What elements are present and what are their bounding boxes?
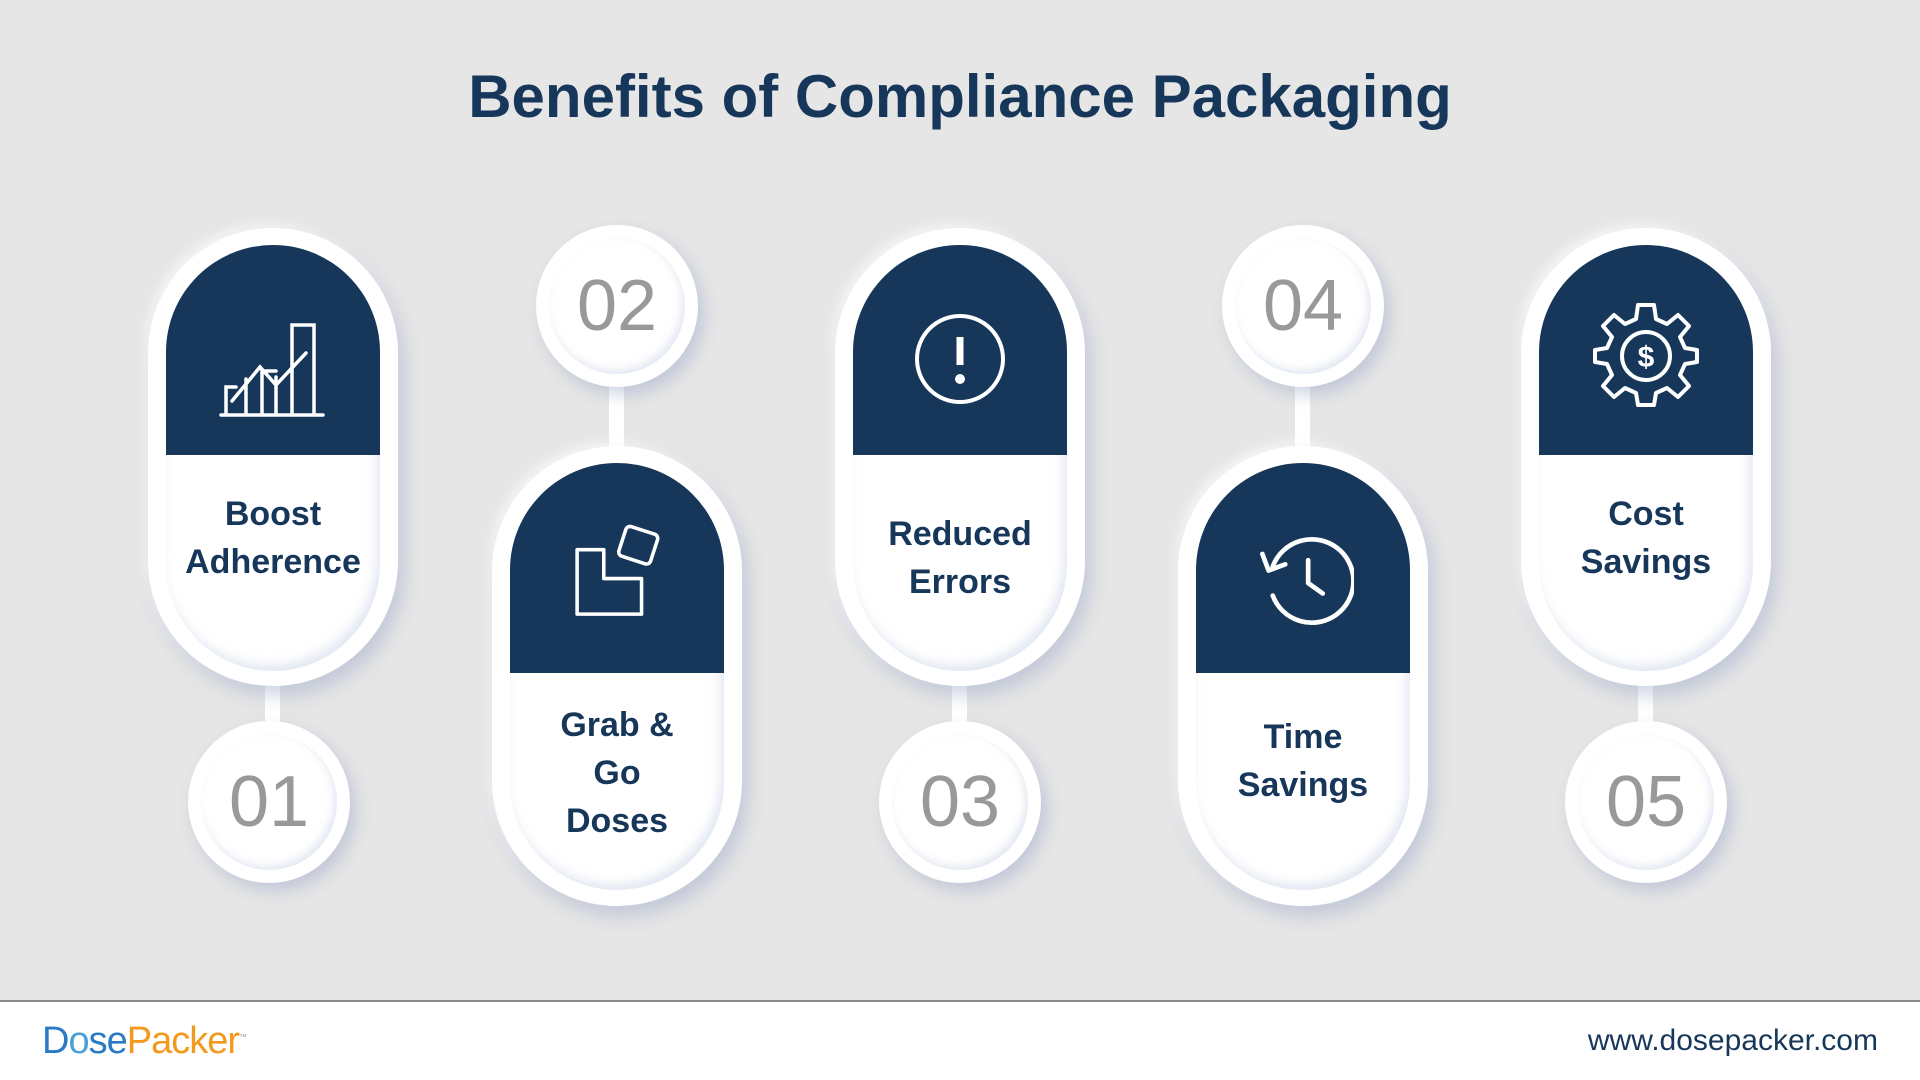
- label: Reduced: [888, 515, 1032, 553]
- footer: [0, 1000, 1920, 1080]
- number 02: 02: [577, 266, 657, 346]
- card 3: Reduced Errors: [835, 228, 1085, 686]
- label: Doses: [566, 802, 668, 840]
- card 1: Boost Adherence: [148, 228, 398, 686]
- card 4: Time Savings: [1178, 446, 1428, 906]
- label: Time: [1264, 718, 1342, 756]
- icon: gear dollar: $: [1638, 341, 1655, 374]
- label: Savings: [1238, 766, 1368, 804]
- connector 5: [1638, 680, 1653, 730]
- label: Grab &: [560, 706, 674, 744]
- label: Savings: [1581, 543, 1711, 581]
- number 02: [536, 225, 698, 387]
- connector 1: [265, 680, 280, 730]
- icon: gear dollar: [1593, 303, 1699, 407]
- label: [560, 706, 674, 840]
- url: www.dosepacker.com: [1588, 1024, 1878, 1057]
- label: Boost: [225, 495, 321, 533]
- label: [888, 515, 1032, 601]
- icon: blocks: [575, 524, 660, 616]
- label: Go: [593, 754, 641, 792]
- number 03: [879, 721, 1041, 883]
- number 03: 03: [920, 762, 1000, 842]
- number 01: [188, 721, 350, 883]
- number 05: [1565, 721, 1727, 883]
- label: Adherence: [185, 543, 361, 581]
- label: [1238, 718, 1368, 804]
- icon: history clock: [1260, 537, 1354, 625]
- number 04: 04: [1263, 266, 1343, 346]
- icon: growth chart: [219, 323, 325, 417]
- label: Errors: [909, 563, 1011, 601]
- card 2: Grab & Go Doses: [492, 446, 742, 906]
- icon: exclamation: [915, 314, 1005, 404]
- logo: DosePacker™: [42, 1020, 246, 1062]
- number 04: [1222, 225, 1384, 387]
- label: [1581, 495, 1711, 581]
- connector 2: [609, 380, 624, 450]
- card 5: Cost Savings: [1521, 228, 1771, 686]
- number 05: 05: [1606, 762, 1686, 842]
- label: Cost: [1608, 495, 1684, 533]
- connector 3: [952, 680, 967, 730]
- number 01: 01: [229, 762, 309, 842]
- connector 4: [1295, 380, 1310, 450]
- title: Benefits of Compliance Packaging: [468, 63, 1452, 130]
- label: [185, 495, 361, 581]
